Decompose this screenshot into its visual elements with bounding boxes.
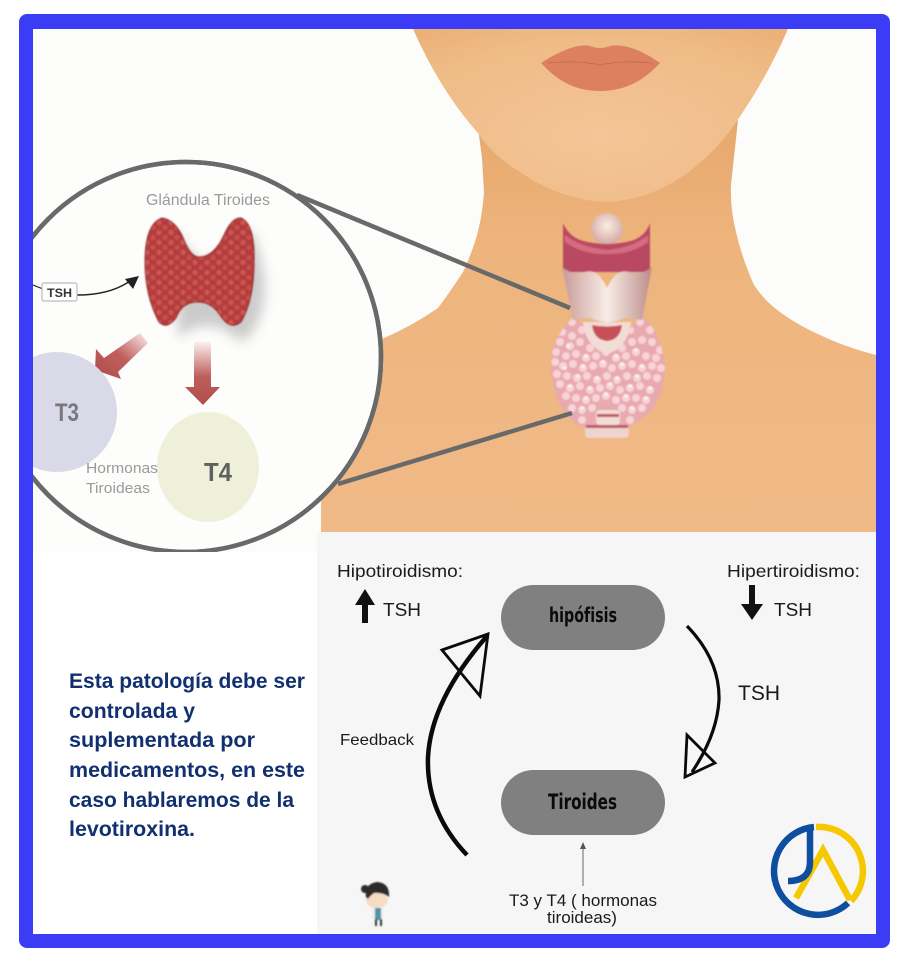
pill: Tiroides [501,770,665,835]
label: Hormonas Tiroideas: Hormonas [86,460,158,477]
arrow to T4 [185,342,220,405]
lower trachea ring [585,410,629,438]
cricoid ring [583,322,631,354]
panel: feedback diagram [317,532,876,934]
hyoid ball [591,213,623,245]
neck and shoulders [321,120,876,532]
T3 circle [33,352,117,472]
label: Feedback: Feedback [340,732,415,749]
lips [541,45,660,91]
thin arrow [580,842,586,886]
pill: hipófisis: hipófisis [549,603,617,627]
TSH tag: TSH [47,286,72,300]
arrow: Feedback curve [428,634,488,855]
gland shadow [175,228,265,342]
label: T3 y T4 [509,891,657,927]
text block: levotiroxina note: medicamentos, en este [69,758,305,782]
thyroid cartilage shield [562,267,652,322]
down arrow [741,585,763,620]
label: TSH up: TSH [383,599,421,620]
TSH feed arrow [33,276,139,295]
larynx and thyroid gland [548,213,668,438]
chin and face [413,29,788,202]
pill: Tiroides: Tiroides [548,790,617,814]
label: TSH: TSH [738,682,780,705]
label: Hipotiroidismo: Hipotiroidismo: [337,561,463,581]
text block: levotiroxina note: Esta patología debe ser [69,669,306,693]
arrow: TSH curve [685,626,719,777]
small thyroid gland [145,218,254,325]
text block: levotiroxina note [69,669,306,841]
label: Hormonas Tiroideas [86,463,158,493]
arrow to T3 [95,333,148,379]
text block: levotiroxina note: caso hablaremos de la [69,788,295,812]
thyroid lobes [550,316,666,428]
TSH tag [42,283,77,301]
logo: JA [774,827,863,915]
label: Hipertiroidismo: Hipertiroidismo: [727,561,860,581]
label: TSH down: TSH [774,599,812,620]
T3 circle: T3 [55,399,79,427]
label: T3 y T4: T3 y T4 ( hormonas [509,891,657,910]
text block: levotiroxina note: levotiroxina. [69,817,195,841]
text block: levotiroxina note: controlada y [69,699,195,723]
up arrow [355,589,375,623]
pointer line upper [297,195,570,308]
circle outline redraw [0,162,381,552]
T4 circle [157,412,259,522]
panel: anatomy illustration [0,29,876,552]
pointer line lower [338,413,572,484]
T4 circle: T4 [204,457,232,487]
label: T3 y T4: tiroideas) [547,908,617,927]
icon: doctor figure [361,882,389,926]
magnifier circle [0,162,381,552]
text block: levotiroxina note: suplementada por [69,728,256,752]
label: Hormonas Tiroideas: Tiroideas [86,480,150,497]
upper cartilage [563,223,650,272]
cricoid opening [592,325,622,341]
pill: hipófisis [501,585,665,650]
label: Glándula Tiroides: Glándula Tiroides [146,192,270,209]
